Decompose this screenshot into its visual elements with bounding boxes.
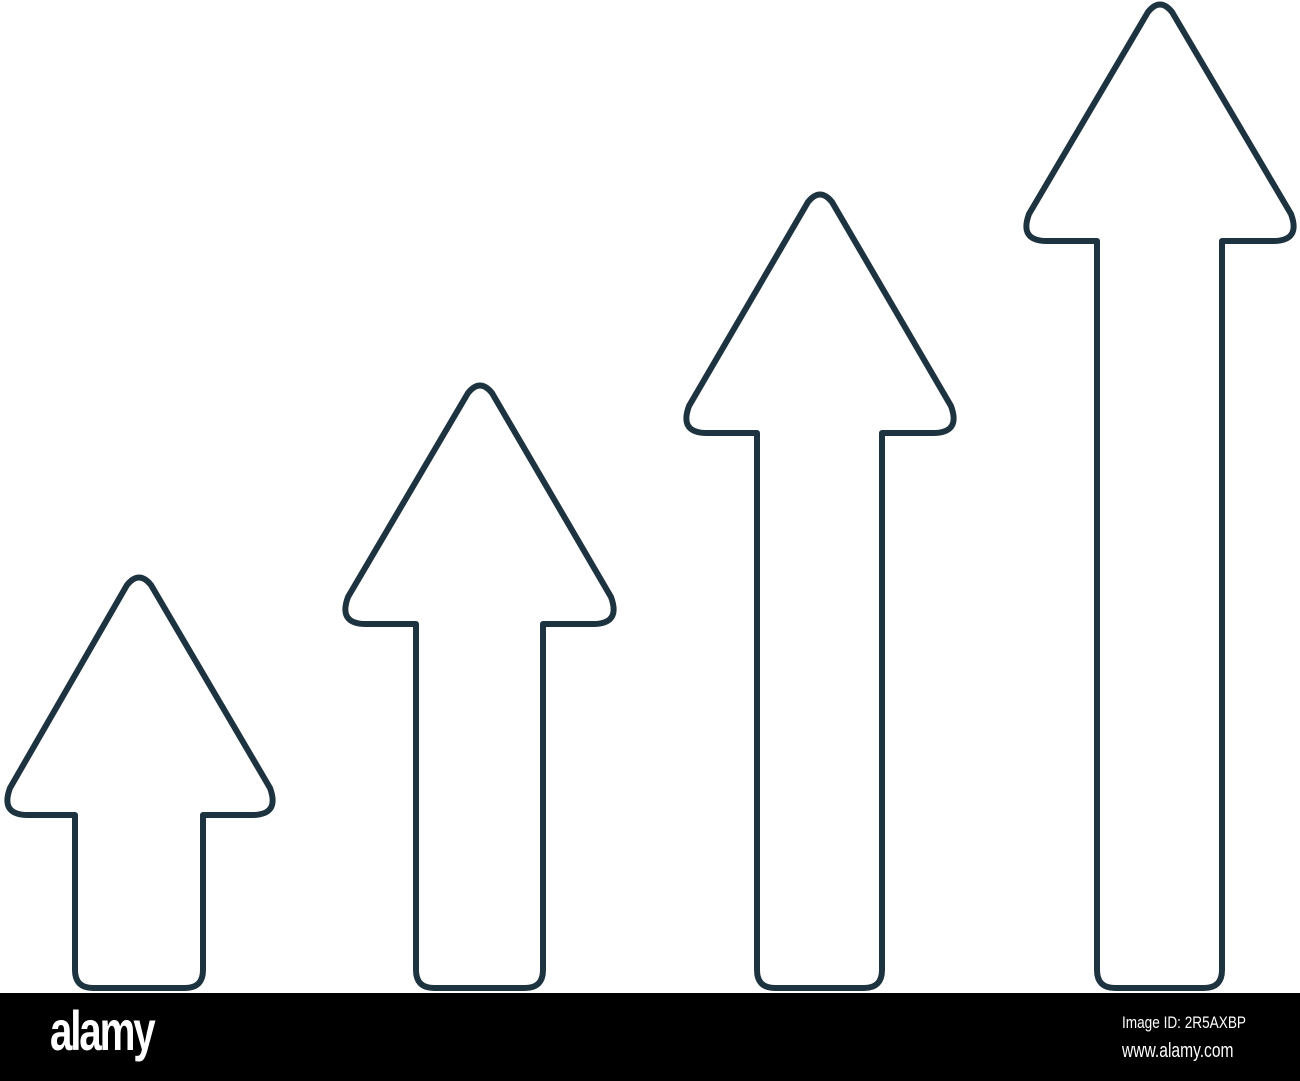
arrow 4 <box>1026 4 1294 988</box>
image id text: Image ID: 2R5AXBP <box>1122 1013 1246 1032</box>
arrow 1 <box>7 578 273 988</box>
arrow 2 <box>345 386 614 988</box>
footer bar <box>0 993 1300 1081</box>
image id text: www.alamy.com <box>1122 1040 1234 1062</box>
arrow 3 <box>686 194 954 988</box>
logo: alamy: alamy <box>50 999 154 1062</box>
image id text <box>1122 1013 1246 1062</box>
